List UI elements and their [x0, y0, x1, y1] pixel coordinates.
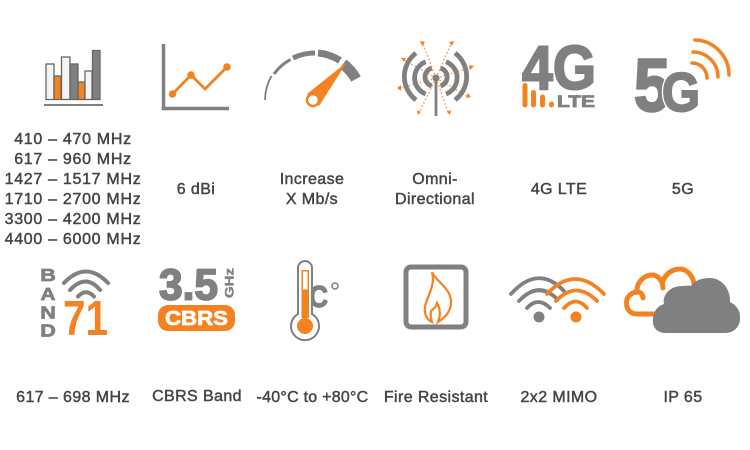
icon: 5G: G [662, 61, 700, 123]
label: Omni-Directional: Directional [395, 191, 475, 208]
icon: 3.5 GHz CBRS: 3.5 [159, 260, 218, 310]
icon: speed gauge [265, 53, 356, 106]
text: frequency ranges: 410 – 470 MHz [14, 131, 132, 148]
icon: Band 71 [40, 266, 108, 346]
label: Increase X Mb/s [280, 171, 344, 208]
icon: Band 71: 71 [63, 292, 108, 346]
icon: 2x2 MIMO wifi [511, 278, 604, 322]
label: temperature range: -40°C to +80°C [257, 389, 368, 406]
text: frequency ranges: 1710 – 2700 MHz [5, 191, 141, 208]
icon: 4G LTE: 4G [522, 34, 596, 103]
text: frequency ranges: 617 – 960 MHz [14, 151, 132, 168]
label: 617 – 698 MHz: 617 – 698 MHz [16, 389, 130, 406]
icon: frequency bar chart [44, 50, 103, 106]
label: Increase X Mb/s: Increase [280, 171, 344, 188]
icon: IP 65 clouds [626, 269, 740, 333]
icon: fire resistant [406, 267, 466, 327]
icon: 3.5 GHz CBRS: CBRS [165, 308, 228, 330]
icon: gain line chart [164, 44, 231, 108]
icon: 3.5 GHz CBRS: GHz [222, 268, 236, 298]
text: frequency ranges: 1427 – 1517 MHz [5, 171, 141, 188]
label: Increase X Mb/s: X Mb/s [286, 191, 338, 208]
icon: Band 71: A [41, 284, 55, 305]
icon: 5G: 5 [634, 44, 670, 127]
icon: Band 71: N [40, 303, 56, 323]
label: Omni-Directional: Omni- [412, 171, 458, 188]
label: IP 65: IP 65 [663, 389, 703, 406]
icon: omni-directional antenna [397, 41, 474, 116]
icon: Band 71: D [40, 321, 56, 341]
label: 2x2 MIMO: 2x2 MIMO [520, 389, 598, 406]
label: 6 dBi: 6 dBi [177, 181, 215, 198]
label: Omni-Directional [395, 171, 475, 208]
icon: Band 71: B [40, 266, 56, 286]
icon: thermometer: C [309, 279, 328, 314]
text: frequency ranges [5, 131, 141, 248]
text: frequency ranges: 3300 – 4200 MHz [5, 211, 141, 228]
label: CBRS Band: CBRS Band [152, 388, 242, 405]
text: frequency ranges: 4400 – 6000 MHz [5, 231, 141, 248]
label: 4G LTE: 4G LTE [531, 181, 587, 198]
icon: thermometer [291, 261, 338, 340]
icon: 5G [634, 40, 729, 127]
label: 5G: 5G [672, 181, 694, 198]
label: Fire Resistant: Fire Resistant [384, 389, 488, 406]
icon: 5G: G [662, 61, 700, 123]
icon: 4G LTE: LTE [557, 92, 595, 111]
icon: 3.5 GHz CBRS [158, 260, 236, 331]
